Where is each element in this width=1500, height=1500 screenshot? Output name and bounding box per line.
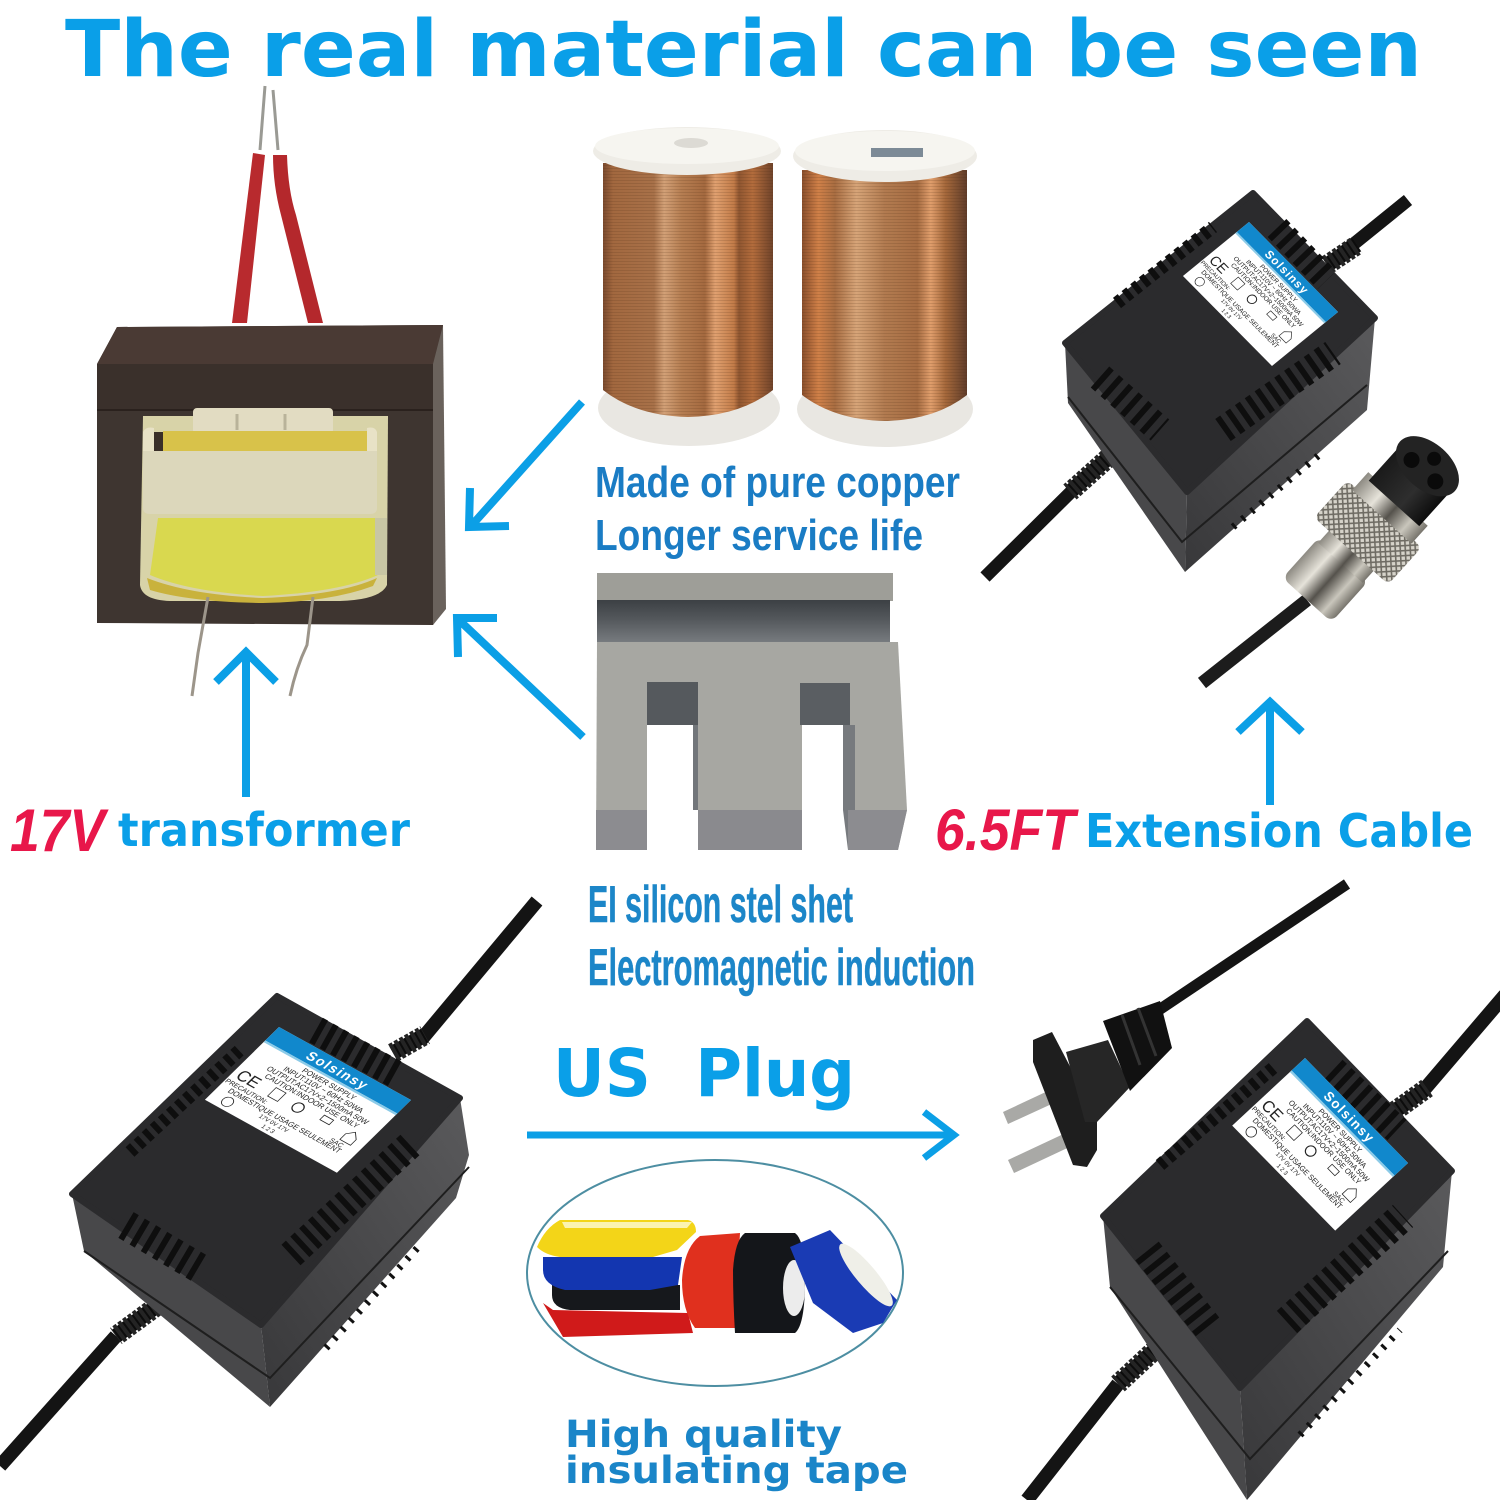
strain reliefs [1070,245,1357,492]
product label: POWER SUPPLY [1316,1107,1364,1155]
adapter body [1103,1021,1452,1500]
product label: CE [1257,1097,1286,1125]
panel: insulating tape [527,1160,903,1386]
panel: adapter with extension cable [985,193,1480,683]
product label: SAC [1331,1190,1346,1205]
tape caption: High quality [565,1413,842,1456]
product label: POWER SUPPLY [1258,264,1299,304]
power cord [0,901,537,1466]
label: 17V transformer [10,797,410,864]
arrow: cable up [1238,702,1302,805]
product label: DOMESTIQUE USAGE SEULEMENT [1199,269,1280,350]
product label: CE [231,1067,266,1092]
product label: 17V 0V 17V [257,1113,291,1134]
adapter body [1065,193,1375,572]
product label: OUTPUT:AC17V×2~1500mA 50W [1287,1098,1372,1185]
thin output wires [192,597,313,696]
title: The real material can be seen [65,5,1422,95]
black flat tape [552,1285,680,1310]
power cord [1027,995,1500,1500]
red flat tape [543,1303,693,1337]
label: US Plug: US Plug [553,1035,855,1112]
product label: 17V 0V 17V [1219,298,1243,322]
arrow: steel to transformer [457,618,583,737]
panel: transformer photo [97,86,446,696]
label: 17V transformer: 17V [10,797,109,864]
label: 6.5FT extension cable [935,798,1473,863]
steel caption: EI silicon stel shet [588,876,853,934]
product label: DOMESTIQUE USAGE SEULEMENT [226,1087,344,1155]
product label: Solsinsy [302,1048,373,1093]
tape caption: insulating tape [565,1449,908,1492]
transformer core [97,325,446,625]
label: 17V transformer: transformer [118,803,410,857]
product label: CAUTION:INDOOR USE ONLY [1284,1106,1363,1186]
product label: 17V 0V 17V [1274,1152,1300,1178]
coil and bobbin [140,408,388,603]
arrow: US plug [527,1112,954,1158]
product label: SAC [1269,333,1282,345]
arrow: transformer up [216,652,276,797]
spool left [593,127,781,446]
product label: OUTPUT:AC17V×2~1500mA 50W [264,1065,371,1127]
product label: CAUTION:INDOOR USE ONLY [262,1072,361,1130]
power cord [985,200,1408,577]
copper caption: Longer service life [595,511,923,560]
spool right [793,130,977,447]
product label: INPUT:110V ~ 60Hz 50WA [1244,259,1303,317]
panel: copper wire spools [593,127,977,447]
product label [1183,222,1338,366]
label: 6.5FT extension cable: 6.5FT [935,798,1079,863]
label: 6.5FT extension cable: Extension Cable [1085,804,1473,858]
product label: 1 2 3 [1220,308,1232,320]
red lead wires [232,86,323,323]
copper caption: Made of pure copper [595,458,960,507]
product label: CE [1205,253,1231,277]
red roll [682,1233,740,1328]
panel: adapter, left view [0,901,537,1466]
product label: PRECAUTION: [223,1078,269,1106]
product label [1232,1058,1408,1231]
panel: EI silicon steel core [596,573,907,851]
product label: PRECAUTION: [1199,260,1231,292]
product label: Solsinsy [1320,1088,1378,1146]
product label: SAC [327,1138,345,1149]
product label: Solsinsy [1261,248,1312,297]
blue tilted roll [790,1230,897,1333]
product label: DOMESTIQUE USAGE SEULEMENT [1251,1116,1344,1211]
product label: PRECAUTION: [1250,1106,1287,1143]
product label: CAUTION:INDOOR USE ONLY [1229,262,1297,330]
arrow: copper to transformer [469,402,582,527]
adapter body [72,996,469,1407]
panel: adapter with US plug [1003,884,1500,1500]
product label: INPUT:110V ~ 60Hz 50WA [1301,1102,1368,1170]
black roll [733,1233,805,1333]
product label [205,1027,411,1173]
product label: POWER SUPPLY [300,1067,358,1102]
product label: OUTPUT:AC17V×2~1500mA 50W [1231,256,1305,329]
steel caption: Electromagnetic induction [588,939,975,997]
product label: 1 2 3 [259,1124,277,1135]
strain reliefs [116,1035,425,1336]
product label: 1 2 3 [1275,1163,1289,1177]
US plug [1003,1001,1172,1173]
yellow flat tape [537,1220,696,1257]
product label: INPUT:110V ~ 60Hz 50WA [281,1065,366,1115]
strain reliefs [1118,1088,1427,1384]
mains cord [1150,884,1347,1016]
tape ellipse outline [527,1160,903,1386]
aviation connector [1202,416,1480,683]
blue flat tape [543,1257,682,1290]
